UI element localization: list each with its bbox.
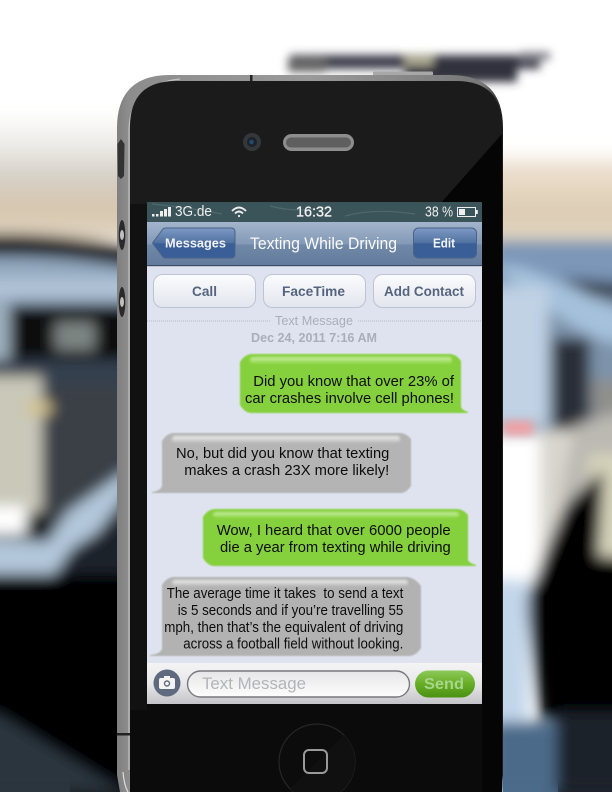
message bubble 3: Wow, I heard that over 6000 people	[217, 522, 451, 539]
call button	[154, 274, 256, 308]
speaker	[283, 134, 354, 151]
add contact button	[374, 274, 476, 308]
edit button: Edit	[433, 236, 456, 250]
right side	[490, 150, 612, 242]
message bubble 1	[240, 354, 468, 413]
phone body	[117, 72, 503, 792]
message bubble 2: makes a crash 23X more likely!	[184, 462, 389, 479]
call button: Call	[192, 283, 217, 299]
metal band	[117, 75, 503, 792]
navigation bar	[147, 222, 482, 266]
back button: Messages	[165, 236, 226, 250]
text input	[188, 671, 410, 697]
message bubble 3	[203, 509, 476, 566]
timestamp: Text Message	[275, 313, 353, 328]
message bubble 2	[152, 433, 411, 493]
signal bars	[152, 207, 171, 216]
message input bar	[147, 663, 482, 704]
facetime button: FaceTime	[282, 283, 345, 299]
message bubble 3: die a year from texting while driving	[220, 539, 451, 556]
message bubble 4: The average time it takes to send a text	[167, 585, 404, 602]
message bubble 4: is 5 seconds and if you’re travelling 55	[178, 602, 403, 619]
battery icon	[458, 208, 478, 216]
message bubble 2: No, but did you know that texting	[176, 445, 389, 462]
front glass	[130, 81, 502, 792]
message bubble 1: Did you know that over 23% of	[253, 373, 455, 390]
send button	[415, 670, 475, 698]
facetime button	[264, 274, 366, 308]
timestamp	[147, 313, 481, 345]
message bubble 1: car crashes involve cell phones!	[245, 390, 454, 407]
text input: Text Message	[202, 674, 306, 693]
edit button	[414, 228, 476, 258]
clock: 16:32	[296, 204, 332, 220]
top power button	[373, 72, 433, 76]
volume buttons	[119, 220, 125, 317]
title: Texting While Driving	[250, 234, 397, 253]
left side	[0, 110, 150, 240]
home button	[279, 724, 355, 792]
screen background	[147, 202, 482, 704]
camera	[243, 133, 261, 151]
carrier: 3G.de	[175, 203, 212, 220]
add contact button: Add Contact	[384, 283, 464, 299]
message bubble 4: mph, then that’s the equivalent of driving	[164, 619, 403, 636]
camera button	[154, 670, 180, 696]
message bubble 4	[150, 577, 421, 656]
status bar	[147, 202, 482, 222]
message bubble 4: across a football field without looking.	[183, 636, 403, 653]
battery percent: 38 %	[425, 204, 453, 220]
wifi icon	[232, 208, 246, 217]
back button	[152, 228, 235, 258]
screen	[147, 202, 482, 704]
send button: Send	[424, 676, 464, 693]
mute switch	[118, 139, 124, 179]
action buttons	[154, 274, 476, 308]
timestamp: Dec 24, 2011 7:16 AM	[251, 330, 377, 345]
